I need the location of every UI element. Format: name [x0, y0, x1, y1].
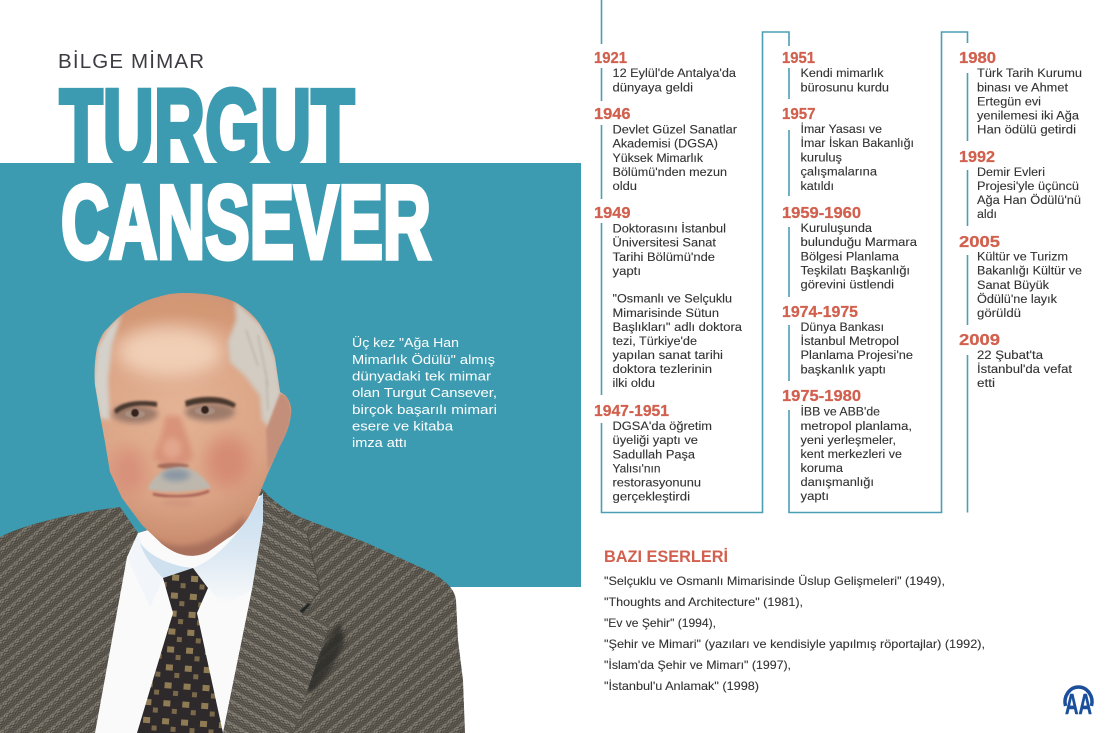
event 1949: ilki oldu: [612, 376, 655, 390]
event 1921: dünyaya geldi: [612, 80, 693, 94]
hair right: [228, 300, 282, 428]
jacket: [0, 489, 465, 733]
event 1949: Tarihi Bölümü'nde: [612, 250, 715, 264]
event 1980: yenilemesi iki Ağa: [977, 108, 1079, 122]
event 1949: Üniversitesi Sanat: [612, 236, 717, 250]
list of works: "İslam'da Şehir ve Mimarı" (1997),: [604, 658, 791, 672]
event 1921: 12 Eylül'de Antalya'da: [612, 66, 736, 80]
event 1947-1951: Yalısı'nın: [612, 462, 661, 476]
event 1957: kuruluş: [800, 150, 842, 164]
timeline column 2: [782, 50, 917, 503]
event 1992: Projesi'yle üçüncü: [977, 179, 1079, 193]
timeline column 3: [959, 50, 1082, 390]
event 1947-1951: restorasyonunu: [612, 476, 701, 490]
event 1992: 1992: [959, 149, 995, 166]
event 1949: [594, 205, 742, 390]
portrait of Turgut Cansever: [0, 293, 465, 733]
event 1947-1951: üyeliği yaptı ve: [612, 433, 698, 447]
event 1975-1980: yaptı: [800, 489, 829, 503]
event 1949: doktora tezlerinin: [612, 362, 712, 376]
event 1949: tezi, Türkiye'de: [612, 334, 697, 348]
event 2005: [959, 234, 1082, 320]
event 1975-1980: metropol planlama,: [800, 419, 912, 433]
event 1957: [782, 106, 914, 193]
event 1992: [959, 149, 1081, 221]
event 1974-1975: Dünya Bankası: [800, 320, 884, 334]
event 1974-1975: 1974-1975: [782, 304, 858, 321]
intro text: [352, 335, 497, 450]
event 1959-1960: 1959-1960: [782, 205, 861, 222]
intro text: imza attı: [352, 435, 407, 450]
event 2005: Sanat Büyük: [977, 278, 1050, 292]
nose shadow: [157, 463, 189, 469]
event 1957: İmar İskan Bakanlığı: [800, 136, 914, 150]
left eye socket: [112, 405, 158, 423]
event 1946: [594, 106, 737, 193]
event 2009: etti: [977, 376, 995, 390]
event 2009: İstanbul'da vefat: [977, 362, 1073, 376]
ear: [266, 393, 291, 470]
mouth: [153, 491, 209, 496]
event 1975-1980: danışmanlığı: [800, 475, 874, 489]
intro text: birçok başarılı mimari: [352, 402, 497, 417]
hair left: [93, 314, 122, 420]
panel: teal background: [0, 163, 581, 587]
event 1946: 1946: [594, 106, 631, 123]
event 1949: yapılan sanat tarihi: [612, 348, 723, 362]
nose: [153, 416, 193, 466]
right collar: [193, 493, 263, 607]
event 1980: Türk Tarih Kurumu: [977, 66, 1082, 80]
right brow: [185, 397, 236, 408]
event 1974-1975: başkanlık yaptı: [800, 362, 886, 376]
event 1951: bürosunu kurdu: [800, 80, 889, 94]
event 1951: 1951: [782, 50, 815, 67]
event 1957: 1957: [782, 106, 816, 123]
event 1974-1975: Planlama Projesi'ne: [800, 348, 913, 362]
event 1957: çalışmalarına: [800, 164, 877, 178]
left collar: [128, 533, 193, 607]
event 1980: binası ve Ahmet: [977, 80, 1069, 94]
event 1992: Ağa Han Ödülü'nü: [977, 193, 1081, 207]
event 2005: Bakanlığı Kültür ve: [977, 264, 1082, 278]
intro text: Mimarlık Ödülü" almış: [352, 352, 496, 367]
event 1946: oldu: [612, 179, 637, 193]
event 2009: [959, 332, 1073, 390]
event 1992: aldı: [977, 207, 997, 221]
head: [93, 293, 291, 565]
event 1946: Yüksek Mimarlık: [612, 151, 704, 165]
timeline connector lines: [602, 0, 968, 512]
event 1992: Demir Evleri: [977, 165, 1045, 179]
event 1946: Akademisi (DGSA): [612, 136, 718, 150]
event 1975-1980: [782, 388, 912, 503]
event 1949: Doktorasını İstanbul: [612, 221, 726, 235]
event 1949: 1949: [594, 205, 631, 222]
event 2009: 22 Şubat'ta: [977, 348, 1043, 362]
event 2005: 2005: [959, 234, 1000, 251]
kicker: BİLGE MİMAR: BİLGE MİMAR: [58, 50, 204, 73]
list of works: "Selçuklu ve Osmanlı Mimarisinde Üslup Gelişmeleri" (1949),: [604, 574, 945, 588]
event 1959-1960: görevini üstlendi: [800, 278, 894, 292]
right eye: [195, 406, 215, 415]
lower lip: [161, 499, 195, 507]
left eye: [125, 409, 145, 418]
event 1951: Kendi mimarlık: [800, 66, 884, 80]
event 1949: Mimarisinde Sütun: [612, 306, 719, 320]
event 1946: Bölümü'nden mezun: [612, 165, 727, 179]
event 1949: Başlıkları" adlı doktora: [612, 320, 742, 334]
event 1975-1980: İBB ve ABB'de: [800, 405, 880, 419]
event 1975-1980: 1975-1980: [782, 388, 861, 405]
title: CANSEVER: CANSEVER: [61, 165, 431, 281]
event 1959-1960: [782, 205, 917, 292]
icon: AA logo: AA: [1065, 689, 1092, 721]
event 1921: 1921: [594, 50, 627, 67]
event 2005: Ödülü'ne layık: [977, 292, 1058, 306]
list of works: "İstanbul'u Anlamak" (1998): [604, 679, 759, 693]
intro text: Üç kez "Ağa Han: [352, 335, 459, 350]
right eye socket: [185, 403, 235, 421]
event 1947-1951: DGSA'da öğretim: [612, 419, 712, 433]
intro text: dünyadaki tek mimar: [352, 368, 492, 384]
event 2005: Kültür ve Turizm: [977, 250, 1068, 264]
event 2009: 2009: [959, 332, 1000, 349]
event 1947-1951: 1947-1951: [594, 403, 669, 420]
hair strands: [246, 330, 268, 410]
list of works: "Ev ve Şehir" (1994),: [604, 616, 716, 630]
event 1947-1951: gerçekleştirdi: [612, 490, 690, 504]
event 1947-1951: Sadullah Paşa: [612, 448, 695, 462]
right cheek blush: [206, 436, 250, 488]
event 1980: Han ödülü getirdi: [977, 123, 1076, 137]
event 1949: "Osmanlı ve Selçuklu: [612, 292, 732, 306]
moustache: [148, 467, 211, 492]
heading: BAZI ESERLERİ: BAZI ESERLERİ: [604, 548, 728, 566]
timeline column 1: [594, 50, 742, 504]
event 1959-1960: bulunduğu Marmara: [800, 235, 917, 249]
event 1959-1960: Bölgesi Planlama: [800, 250, 899, 264]
event 1980: [959, 50, 1082, 137]
forehead highlight: [118, 328, 222, 376]
event 1951: [782, 50, 889, 94]
list of works: [604, 574, 985, 693]
intro text: esere ve kitaba: [352, 418, 454, 434]
title: TURGUT: TURGUT: [60, 67, 354, 189]
event 1975-1980: koruma: [800, 461, 843, 475]
lapel: [223, 490, 330, 733]
event 1957: katıldı: [800, 179, 834, 193]
intro text: olan Turgut Cansever,: [352, 385, 497, 400]
event 1975-1980: kent merkezleri ve: [800, 447, 902, 461]
list of works: "Şehir ve Mimari" (yazıları ve kendisiyle yapılmış röportajlar) (1992),: [604, 637, 985, 651]
event 1980: 1980: [959, 50, 996, 67]
event 2005: görüldü: [977, 306, 1021, 320]
event 1949: yaptı: [612, 264, 641, 278]
moustache centre tone: [162, 469, 190, 481]
event 1959-1960: Teşkilatı Başkanlığı: [800, 264, 910, 278]
icon: AA logo: [1065, 687, 1092, 721]
tie: [137, 568, 223, 733]
event 1959-1960: Kuruluşunda: [800, 221, 872, 235]
event 1947-1951: [594, 403, 712, 504]
event 1974-1975: İstanbul Metropol: [800, 334, 899, 348]
event 1921: [594, 50, 736, 94]
event 1975-1980: yeni yerleşmeler,: [800, 433, 896, 447]
event 1980: Ertegün evi: [977, 94, 1041, 108]
event 1946: Devlet Güzel Sanatlar: [612, 122, 737, 136]
nose highlight: [163, 438, 181, 458]
chin shade: [156, 516, 246, 556]
event 1957: İmar Yasası ve: [800, 122, 882, 136]
jacket shadow patch: [305, 623, 345, 692]
left brow: [114, 401, 157, 414]
shirt: [95, 495, 263, 733]
crown tone: [118, 293, 232, 324]
event 1974-1975: [782, 304, 913, 376]
list of works: "Thoughts and Architecture" (1981),: [604, 595, 803, 609]
left cheek blush: [110, 448, 146, 496]
